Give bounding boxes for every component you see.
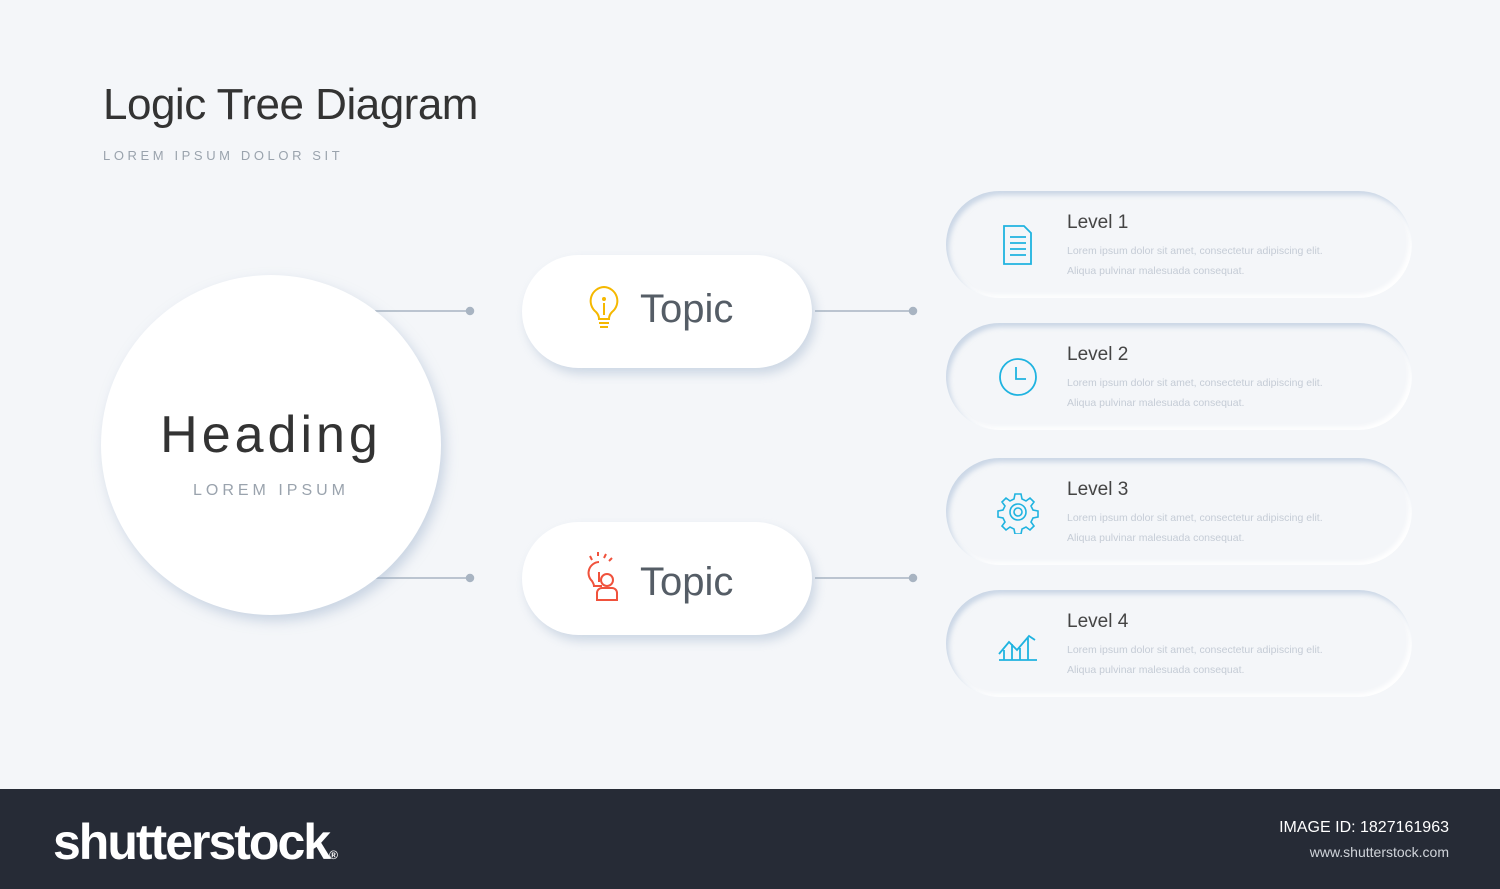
- footer logo: shutterstock®: [53, 814, 336, 870]
- url: www.shutterstock.com: [1310, 844, 1449, 860]
- level 2: Aliqua pulvinar malesuada consequat.: [1067, 397, 1244, 409]
- title: Logic Tree Diagram: [103, 80, 478, 129]
- icon: idea person: [588, 552, 618, 601]
- level 4: Aliqua pulvinar malesuada consequat.: [1067, 664, 1244, 676]
- level 2: Lorem ipsum dolor sit amet, consectetur adipiscing elit.: [1067, 377, 1323, 389]
- icon: lightbulb: [590, 286, 618, 328]
- heading subtext: LOREM IPSUM: [193, 482, 349, 499]
- level 2: [946, 323, 1412, 430]
- level 3: [946, 458, 1412, 565]
- subtitle: LOREM IPSUM DOLOR SIT: [103, 148, 343, 163]
- level 3: Aliqua pulvinar malesuada consequat.: [1067, 532, 1244, 544]
- heading text: Heading: [160, 406, 382, 464]
- topic pill 1: [522, 255, 812, 368]
- level 3: Lorem ipsum dolor sit amet, consectetur adipiscing elit.: [1067, 512, 1323, 524]
- level 4: [946, 590, 1412, 697]
- level 3: Level 3: [1067, 479, 1128, 500]
- image id: IMAGE ID: 1827161963: [1279, 819, 1449, 836]
- level 2: Level 2: [1067, 344, 1128, 365]
- icon: document: [1003, 225, 1032, 265]
- heading circle: [101, 275, 441, 615]
- level 4: Lorem ipsum dolor sit amet, consectetur adipiscing elit.: [1067, 644, 1323, 656]
- level 1: [946, 191, 1412, 298]
- icon: chart: [998, 634, 1037, 661]
- topic pill 2: [522, 522, 812, 635]
- footer bar: [0, 789, 1500, 889]
- topic label: Topic: [640, 560, 733, 604]
- level 1: Lorem ipsum dolor sit amet, consectetur adipiscing elit.: [1067, 245, 1323, 257]
- icon: gear: [997, 493, 1039, 534]
- level 4: Level 4: [1067, 611, 1128, 632]
- level 1: Level 1: [1067, 212, 1128, 233]
- topic label: Topic: [640, 287, 733, 331]
- level 1: Aliqua pulvinar malesuada consequat.: [1067, 265, 1244, 277]
- icon: clock: [999, 358, 1037, 396]
